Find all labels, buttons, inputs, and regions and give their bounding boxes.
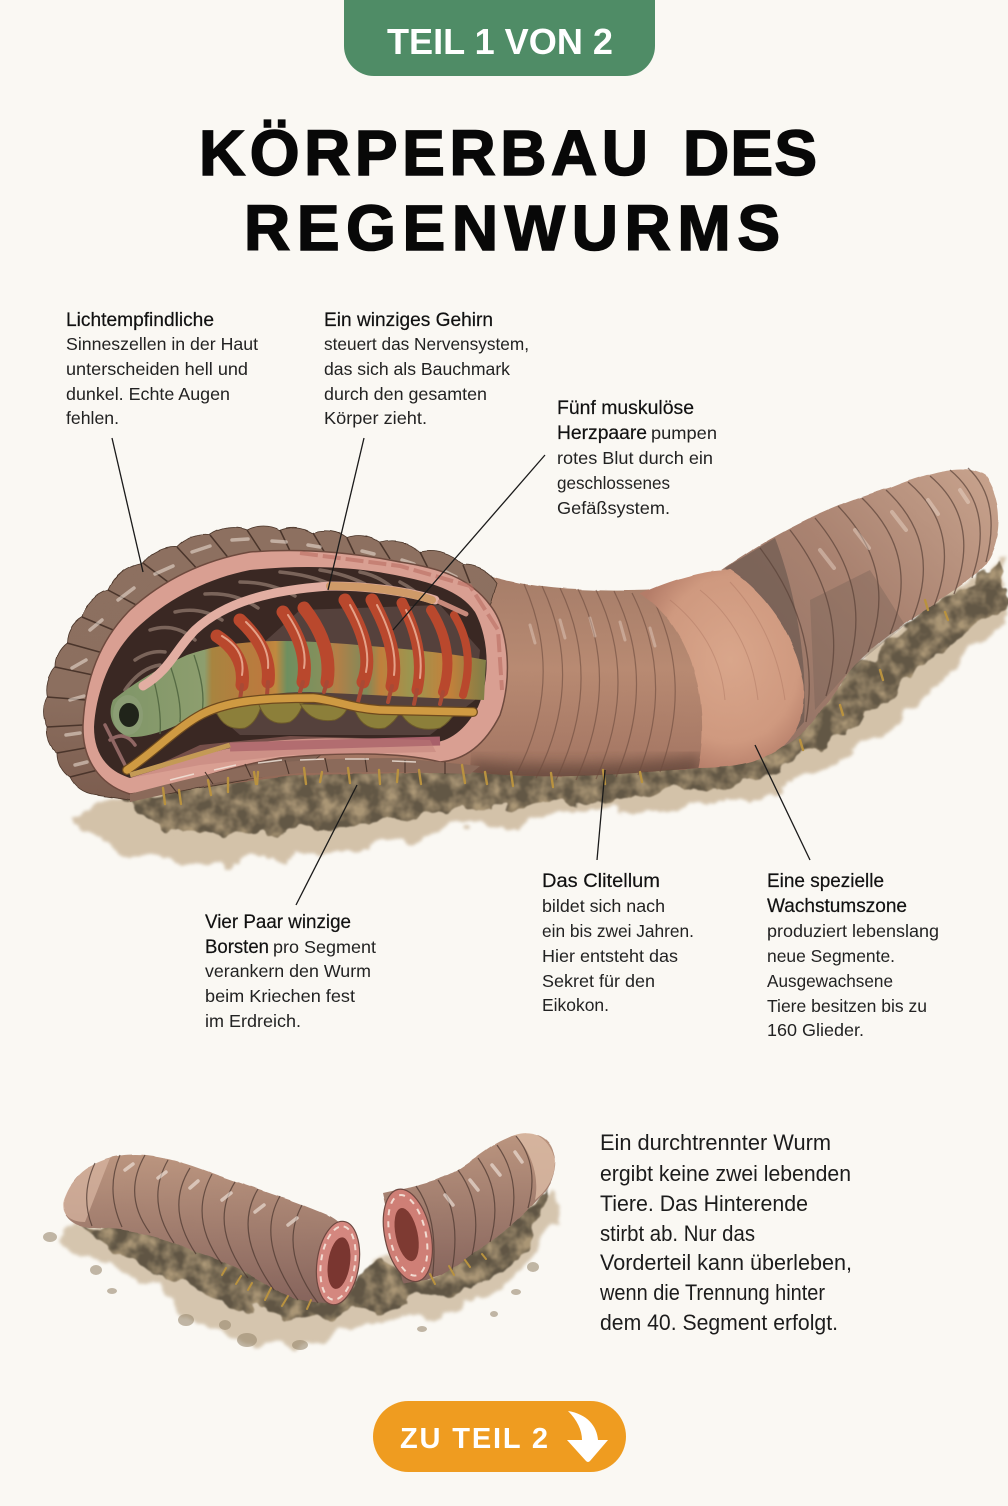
callout: growth zone: Eine spezielle bbox=[767, 871, 884, 892]
bristles bbox=[163, 600, 948, 804]
callout: clitellum: Das Clitellum bbox=[542, 871, 660, 892]
callout: heart pairs bbox=[557, 398, 717, 518]
top tab: Teil 1 von 2 bbox=[344, 0, 655, 76]
left worm piece bbox=[63, 1155, 365, 1308]
rear segment rings bbox=[760, 468, 991, 722]
middle segment rings bbox=[516, 584, 675, 780]
title: DES bbox=[683, 117, 817, 189]
yellow blood vessel bbox=[127, 698, 473, 770]
inner wall tissue bbox=[200, 605, 480, 735]
scalloped head skin bbox=[44, 526, 497, 800]
callout: growth zone: Ausgewachsene bbox=[767, 971, 893, 991]
dorsal nerve / brain bbox=[143, 586, 435, 686]
callout: growth zone: Wachstumszone bbox=[767, 896, 907, 917]
lower skin segments bbox=[130, 758, 480, 802]
callout: heart pairs: Herzpaare bbox=[557, 423, 647, 444]
callout: light-sensitive cells: fehlen. bbox=[66, 408, 119, 428]
title: REGENWURMS bbox=[244, 192, 780, 264]
callout: heart pairs: geschlossenes bbox=[557, 473, 670, 493]
callout: heart pairs: rotes Blut durch ein bbox=[557, 448, 713, 468]
soil under main worm bbox=[70, 560, 1004, 868]
mouth opening bbox=[113, 695, 143, 735]
callout: brain: das sich als Bauchmark bbox=[324, 359, 510, 379]
button: zu Teil 2 bbox=[373, 1401, 626, 1472]
button: zu Teil 2: ZU TEIL 2 bbox=[400, 1423, 548, 1455]
callout: bristles: verankern den Wurm bbox=[205, 961, 371, 981]
callout: growth zone: produziert lebenslang bbox=[767, 921, 939, 941]
soil splotches bbox=[43, 1232, 539, 1350]
soil under cut worm bbox=[43, 1185, 556, 1350]
callout: brain: Körper zieht. bbox=[324, 408, 427, 428]
olive lobes under the gut bbox=[214, 700, 455, 729]
callout: light-sensitive cells bbox=[66, 310, 258, 428]
cut worm bristles bbox=[222, 1254, 486, 1309]
heart pairs bbox=[217, 600, 468, 695]
callout: growth zone: 160 Glieder. bbox=[767, 1020, 864, 1040]
text: cut worm explanation: Ein durchtrennter Wurm bbox=[600, 1130, 831, 1155]
callout: bristles: pro Segment bbox=[273, 937, 376, 957]
text: cut worm explanation: stirbt ab. Nur das bbox=[600, 1221, 755, 1246]
callout: light-sensitive cells: unterscheiden hell und bbox=[66, 359, 248, 379]
callout: growth zone: neue Segmente. bbox=[767, 946, 895, 966]
callout: brain bbox=[324, 310, 529, 428]
illustration: cut worm in two parts bbox=[43, 1133, 556, 1350]
inner body cavity bbox=[94, 567, 487, 778]
callout: bristles: Vier Paar winzige bbox=[205, 912, 351, 933]
worm rear body bbox=[715, 468, 998, 748]
callout: clitellum: Sekret für den bbox=[542, 971, 655, 991]
callout: heart pairs: Gefäßsystem. bbox=[557, 498, 670, 518]
callout: light-sensitive cells: Lichtempfindliche bbox=[66, 310, 214, 331]
title bbox=[199, 117, 817, 264]
ventral vessel bbox=[230, 741, 440, 747]
callout: clitellum: Eikokon. bbox=[542, 995, 609, 1015]
leader lines bbox=[112, 438, 810, 905]
callout: growth zone: Tiere besitzen bis zu bbox=[767, 996, 927, 1016]
callout: bristles bbox=[205, 912, 376, 1031]
body wall ring (cut edge) bbox=[83, 550, 507, 794]
callout: growth zone bbox=[767, 871, 939, 1040]
callout: brain: Ein winziges Gehirn bbox=[324, 310, 493, 331]
callout: bristles: Borsten bbox=[205, 937, 269, 958]
icon: curved down arrow bbox=[567, 1411, 608, 1462]
callout: light-sensitive cells: Sinneszellen in der Haut bbox=[66, 334, 258, 354]
right worm piece bbox=[376, 1133, 555, 1286]
callout: brain: steuert das Nervensystem, bbox=[324, 334, 529, 354]
text: cut worm explanation bbox=[599, 1130, 852, 1335]
worm head and middle body bbox=[44, 526, 730, 800]
callout: bristles: beim Kriechen fest bbox=[205, 986, 355, 1006]
callout: clitellum: Hier entsteht das bbox=[542, 946, 678, 966]
text: cut worm explanation: Tiere. Das Hinterende bbox=[600, 1191, 808, 1216]
callout: heart pairs: pumpen bbox=[651, 423, 717, 443]
text: cut worm explanation: dem 40. Segment erfolgt. bbox=[600, 1310, 838, 1335]
clitellum bbox=[640, 570, 804, 768]
callout: light-sensitive cells: dunkel. Echte Augen bbox=[66, 384, 230, 404]
gut tube bbox=[111, 641, 486, 737]
callout: clitellum bbox=[542, 871, 694, 1015]
callout: clitellum: ein bis zwei Jahren. bbox=[542, 921, 694, 941]
text: cut worm explanation: ergibt keine zwei lebenden bbox=[600, 1161, 851, 1186]
text: cut worm explanation: Vorderteil kann überleben, bbox=[600, 1250, 852, 1275]
callout: bristles: im Erdreich. bbox=[205, 1011, 301, 1031]
text: cut worm explanation: wenn die Trennung hinter bbox=[599, 1280, 825, 1305]
callout: brain: durch den gesamten bbox=[324, 384, 487, 404]
main illustration: earthworm cross-section bbox=[44, 438, 1004, 905]
callout: heart pairs: Fünf muskulöse bbox=[557, 398, 694, 419]
top tab: Teil 1 von 2: TEIL 1 VON 2 bbox=[387, 21, 613, 62]
callout: clitellum: bildet sich nach bbox=[542, 896, 665, 916]
title: KÖRPERBAU bbox=[199, 117, 648, 189]
